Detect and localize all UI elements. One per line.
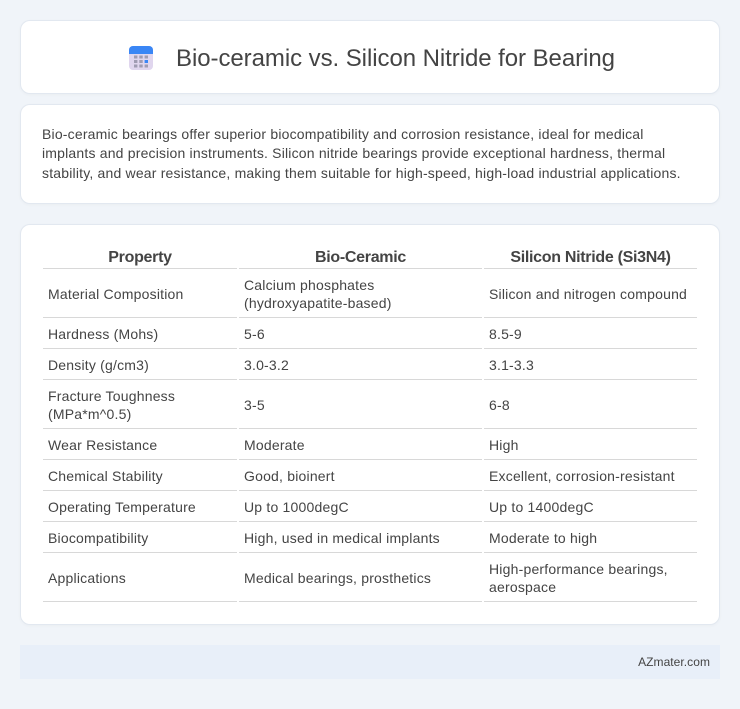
column header: Bio-Ceramic: Bio-Ceramic	[315, 249, 406, 266]
panel: comparison table	[20, 224, 720, 625]
title: Bio-ceramic vs. Silicon Nitride for Bearing	[176, 45, 615, 72]
summary text: implants and precision instruments. Silicon nitride bearings provide exceptional hardness, thermal	[42, 145, 665, 161]
cell: 3.0-3.2	[244, 357, 289, 373]
row: Biocompatibility: Biocompatibility	[48, 530, 148, 546]
cell: Silicon and nitrogen compound	[489, 286, 687, 302]
cell: High, used in medical implants	[244, 530, 440, 546]
cell: 3-5	[244, 397, 265, 413]
cell	[489, 561, 668, 595]
row: Fracture Toughness: (MPa*m^0.5)	[48, 406, 131, 422]
cell: Calcium phosphates	[244, 277, 374, 293]
cell: Excellent, corrosion-resistant	[489, 468, 675, 484]
footer bar	[20, 645, 720, 679]
summary text	[42, 126, 681, 181]
cell: Good, bioinert	[244, 468, 335, 484]
row: Density: Density (g/cm3)	[48, 357, 149, 373]
cell: Medical bearings, prosthetics	[244, 570, 431, 586]
row: Applications: Applications	[48, 570, 126, 586]
footer credit: AZmater.com	[638, 655, 710, 669]
column header: Property: Property	[108, 249, 172, 266]
cell: 8.5-9	[489, 326, 522, 342]
row: Chemical Stability: Chemical Stability	[48, 468, 163, 484]
row: Operating Temperature: Operating Temperature	[48, 499, 196, 515]
cell: 3.1-3.3	[489, 357, 534, 373]
row: Material Composition: Material Composition	[48, 286, 184, 302]
cell: Moderate	[244, 437, 305, 453]
row: Wear Resistance: Wear Resistance	[48, 437, 157, 453]
cell: (hydroxyapatite-based)	[244, 295, 392, 311]
row: Hardness: Hardness (Mohs)	[48, 326, 158, 342]
column header: Silicon Nitride: Silicon Nitride (Si3N4)	[510, 249, 671, 266]
panel: summary	[20, 104, 720, 204]
cell: Up to 1400degC	[489, 499, 594, 515]
row: Fracture Toughness: Fracture Toughness	[48, 388, 175, 404]
icon: calendar	[129, 46, 153, 70]
cell: Moderate to high	[489, 530, 597, 546]
row: Fracture Toughness	[48, 388, 175, 422]
summary text: stability, and wear resistance, making them suitable for high-speed, high-load industrial applications.	[42, 165, 681, 181]
cell: High	[489, 437, 519, 453]
panel: title card	[20, 20, 720, 94]
cell: Up to 1000degC	[244, 499, 349, 515]
summary text: Bio-ceramic bearings offer superior biocompatibility and corrosion resistance, ideal for medical	[42, 126, 644, 142]
cell: aerospace	[489, 579, 556, 595]
cell: High-performance bearings,	[489, 561, 668, 577]
cell: 6-8	[489, 397, 510, 413]
cell	[244, 277, 392, 311]
cell: 5-6	[244, 326, 265, 342]
